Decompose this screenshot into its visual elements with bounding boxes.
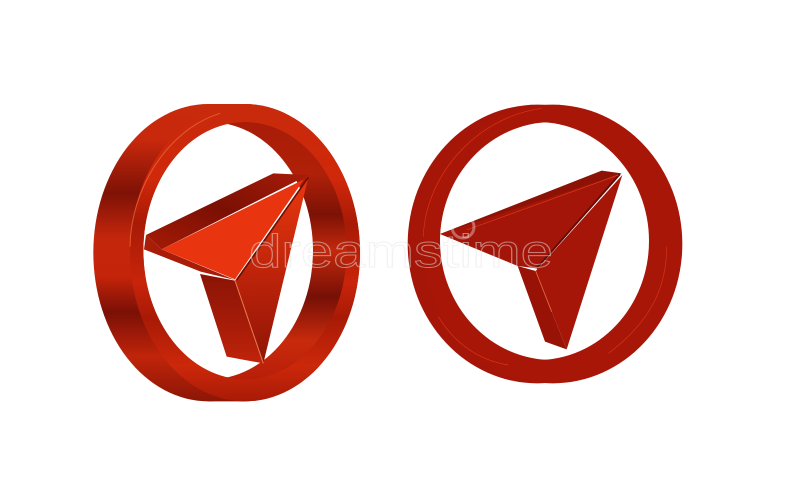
arrow lower left face (200, 274, 263, 363)
arrow (440, 171, 622, 349)
ring highlight lines (423, 108, 667, 365)
arrow upper side face (146, 173, 308, 249)
arrow lower left side (144, 235, 235, 280)
ring body (408, 105, 682, 383)
arrow left face (518, 266, 567, 349)
icon: flat navigation arrow in ring (408, 105, 682, 383)
watermark text: dreamstime (249, 225, 553, 277)
ring hole (143, 124, 313, 378)
ring outer side band (93, 104, 360, 401)
arrow top sliver (440, 171, 622, 234)
watermark logo (452, 216, 474, 238)
rim highlight (130, 113, 220, 247)
arrow right face (536, 175, 622, 349)
arrow (144, 173, 308, 363)
ring front rim (130, 104, 360, 401)
ring hole (426, 122, 649, 360)
icon: 3D angled navigation arrow in ring (93, 104, 360, 401)
arrow top face (162, 179, 304, 279)
arrow main wing (440, 174, 620, 268)
ring inner wall (143, 122, 347, 379)
watermark (249, 216, 553, 277)
illustration canvas (93, 104, 682, 402)
arrow right face (235, 177, 308, 363)
